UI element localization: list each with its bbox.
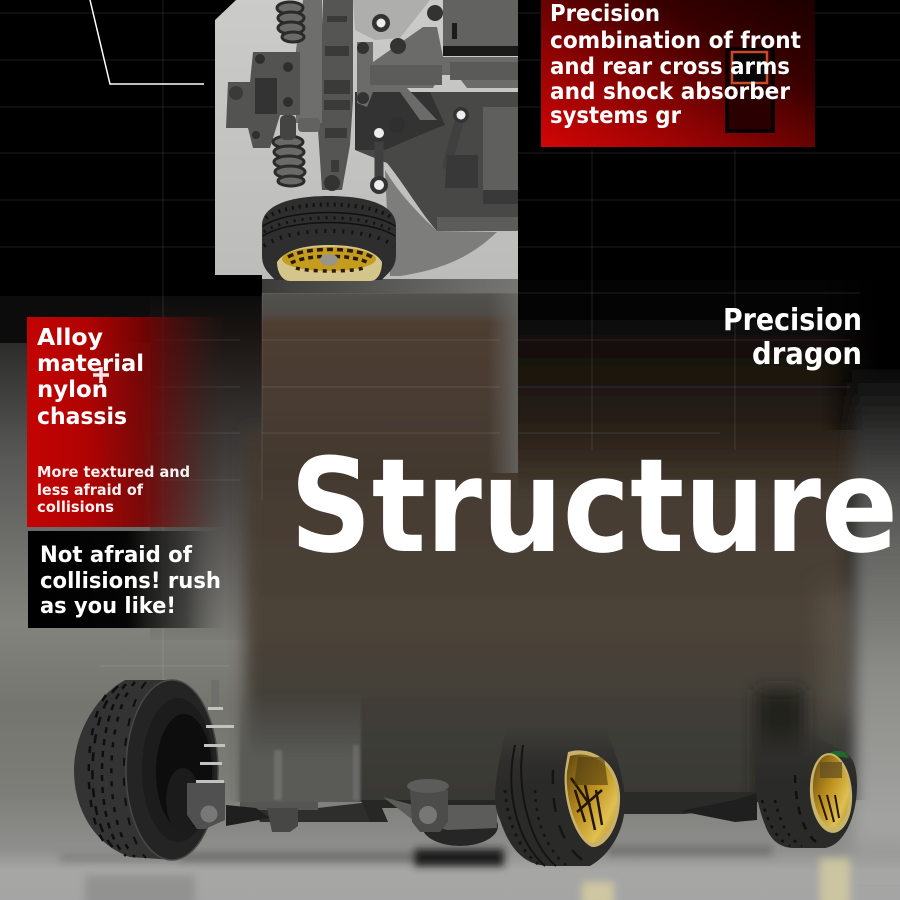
callout text: Precision [550, 1, 660, 27]
front spring and hub [187, 680, 270, 829]
canopy and right plates [353, 0, 430, 40]
front arm column [318, 0, 353, 190]
lower car [60, 680, 857, 900]
gold hub [807, 752, 855, 834]
callout: cross arms panel [541, 0, 815, 147]
springs [273, 2, 305, 186]
inset marker [727, 49, 773, 131]
plus sign [93, 367, 109, 383]
callout text: and shock absorber [550, 79, 791, 105]
callout: not afraid of collisions: collisions! rush [40, 568, 221, 594]
heading text: material [37, 351, 144, 377]
floor reflections [582, 858, 850, 900]
small description [37, 463, 190, 516]
white leader line [90, 0, 204, 84]
background [0, 293, 900, 900]
center arm [383, 797, 497, 830]
callout: not afraid of collisions: as you like! [40, 593, 176, 619]
callout: not afraid of collisions: Not afraid of [40, 542, 192, 568]
light backdrop panel [215, 0, 518, 280]
front wheel [262, 196, 396, 280]
subtitle: dragon [752, 337, 862, 372]
heading text: Alloy [37, 325, 103, 351]
right arm [680, 793, 757, 822]
mid tyre [495, 725, 625, 866]
callout text: systems gr [550, 103, 682, 129]
subtitle: Precision [723, 303, 862, 338]
callout text: combination of front [550, 28, 801, 54]
rear-hidden tyre [422, 806, 498, 846]
steering links [379, 115, 461, 185]
small description: less afraid of [37, 481, 143, 499]
rear tyre [755, 725, 857, 848]
small description: collisions [37, 498, 114, 516]
heading text [37, 325, 144, 430]
small description: More textured and [37, 463, 190, 481]
callout text [550, 1, 801, 129]
heading text: chassis [37, 404, 127, 430]
cross beam [357, 27, 518, 120]
callout text: and rear cross arms [550, 54, 790, 80]
floor shadows [60, 845, 772, 900]
callout: alloy material panel [27, 317, 227, 527]
gold rim [277, 245, 382, 281]
chassis top view [215, 0, 518, 293]
chassis plate [255, 802, 388, 822]
gold hub [565, 750, 620, 847]
subtitle [723, 303, 862, 372]
callout: not afraid of collisions [28, 531, 225, 628]
left bracket [226, 52, 300, 148]
front left tyre [74, 680, 218, 860]
heading text: nylon [37, 377, 108, 403]
lower dark tray [355, 92, 518, 231]
